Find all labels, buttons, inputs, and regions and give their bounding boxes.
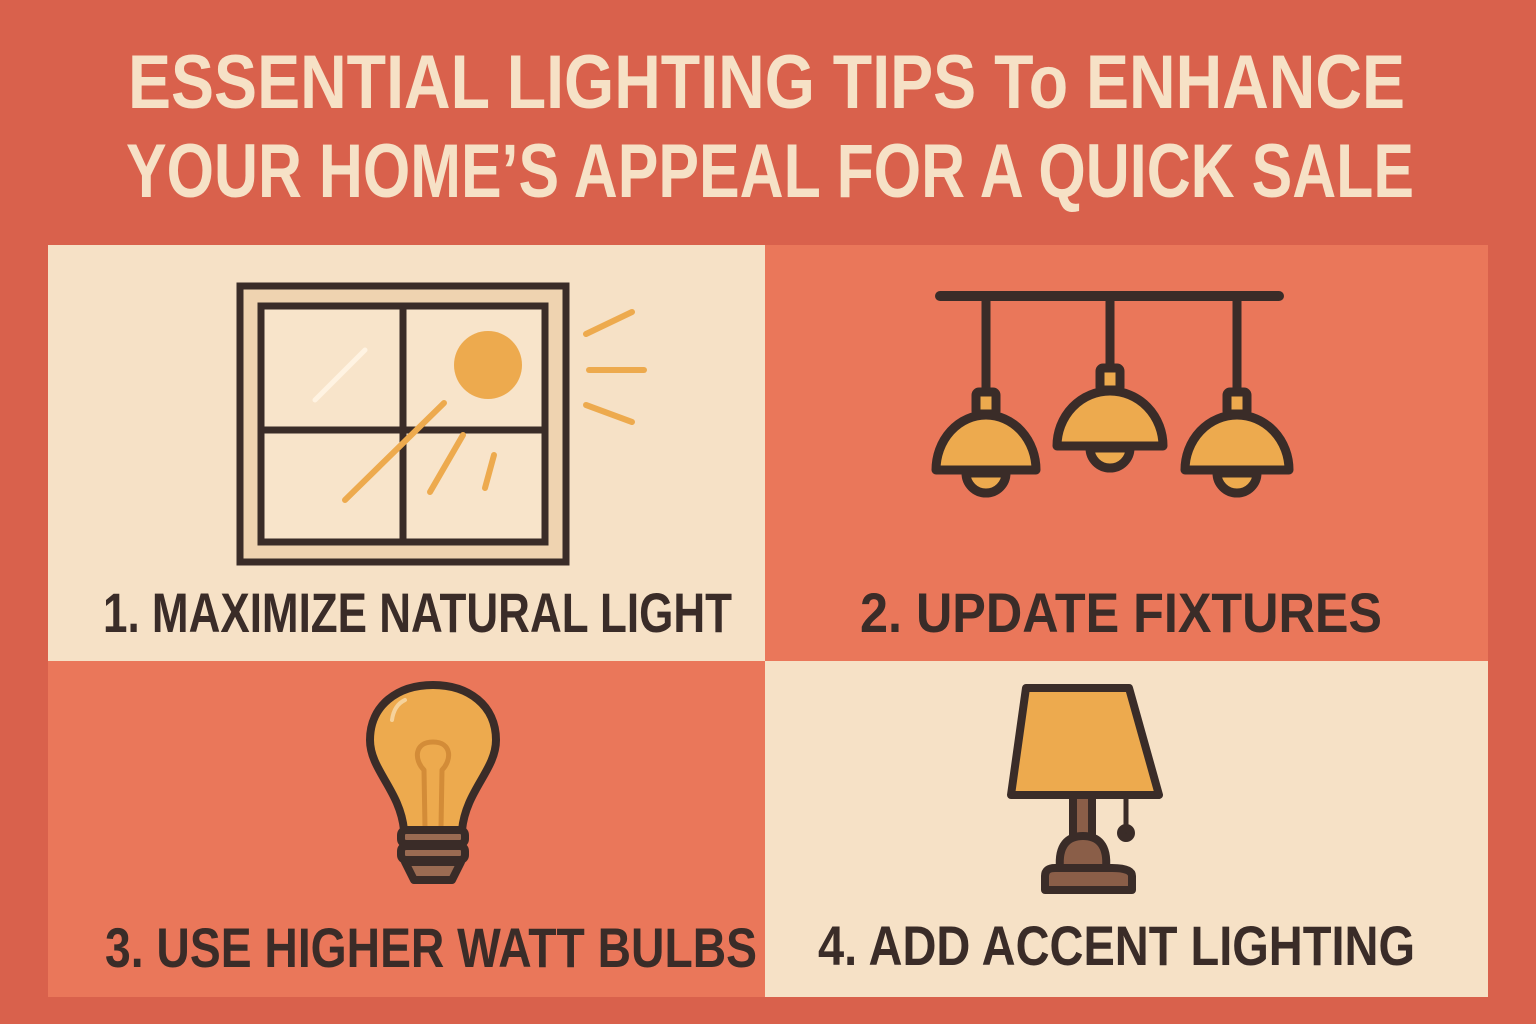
icon: pendant lights	[936, 296, 1289, 493]
panel: higher watt bulbs	[48, 661, 765, 997]
title	[126, 40, 1414, 214]
label 1: 1. MAXIMIZE NATURAL LIGHT	[103, 581, 732, 644]
label 2: 2. UPDATE FIXTURES	[860, 581, 1382, 644]
panel: update fixtures	[765, 245, 1488, 661]
panel: maximize natural light	[48, 245, 765, 661]
label 4: 4. ADD ACCENT LIGHTING	[818, 914, 1415, 977]
label 3: 3. USE HIGHER WATT BULBS	[105, 916, 757, 979]
panel: accent lighting	[765, 661, 1488, 997]
icon: table lamp	[1011, 688, 1159, 890]
icon: light bulb	[370, 685, 496, 880]
icon: window with sun	[240, 286, 644, 562]
